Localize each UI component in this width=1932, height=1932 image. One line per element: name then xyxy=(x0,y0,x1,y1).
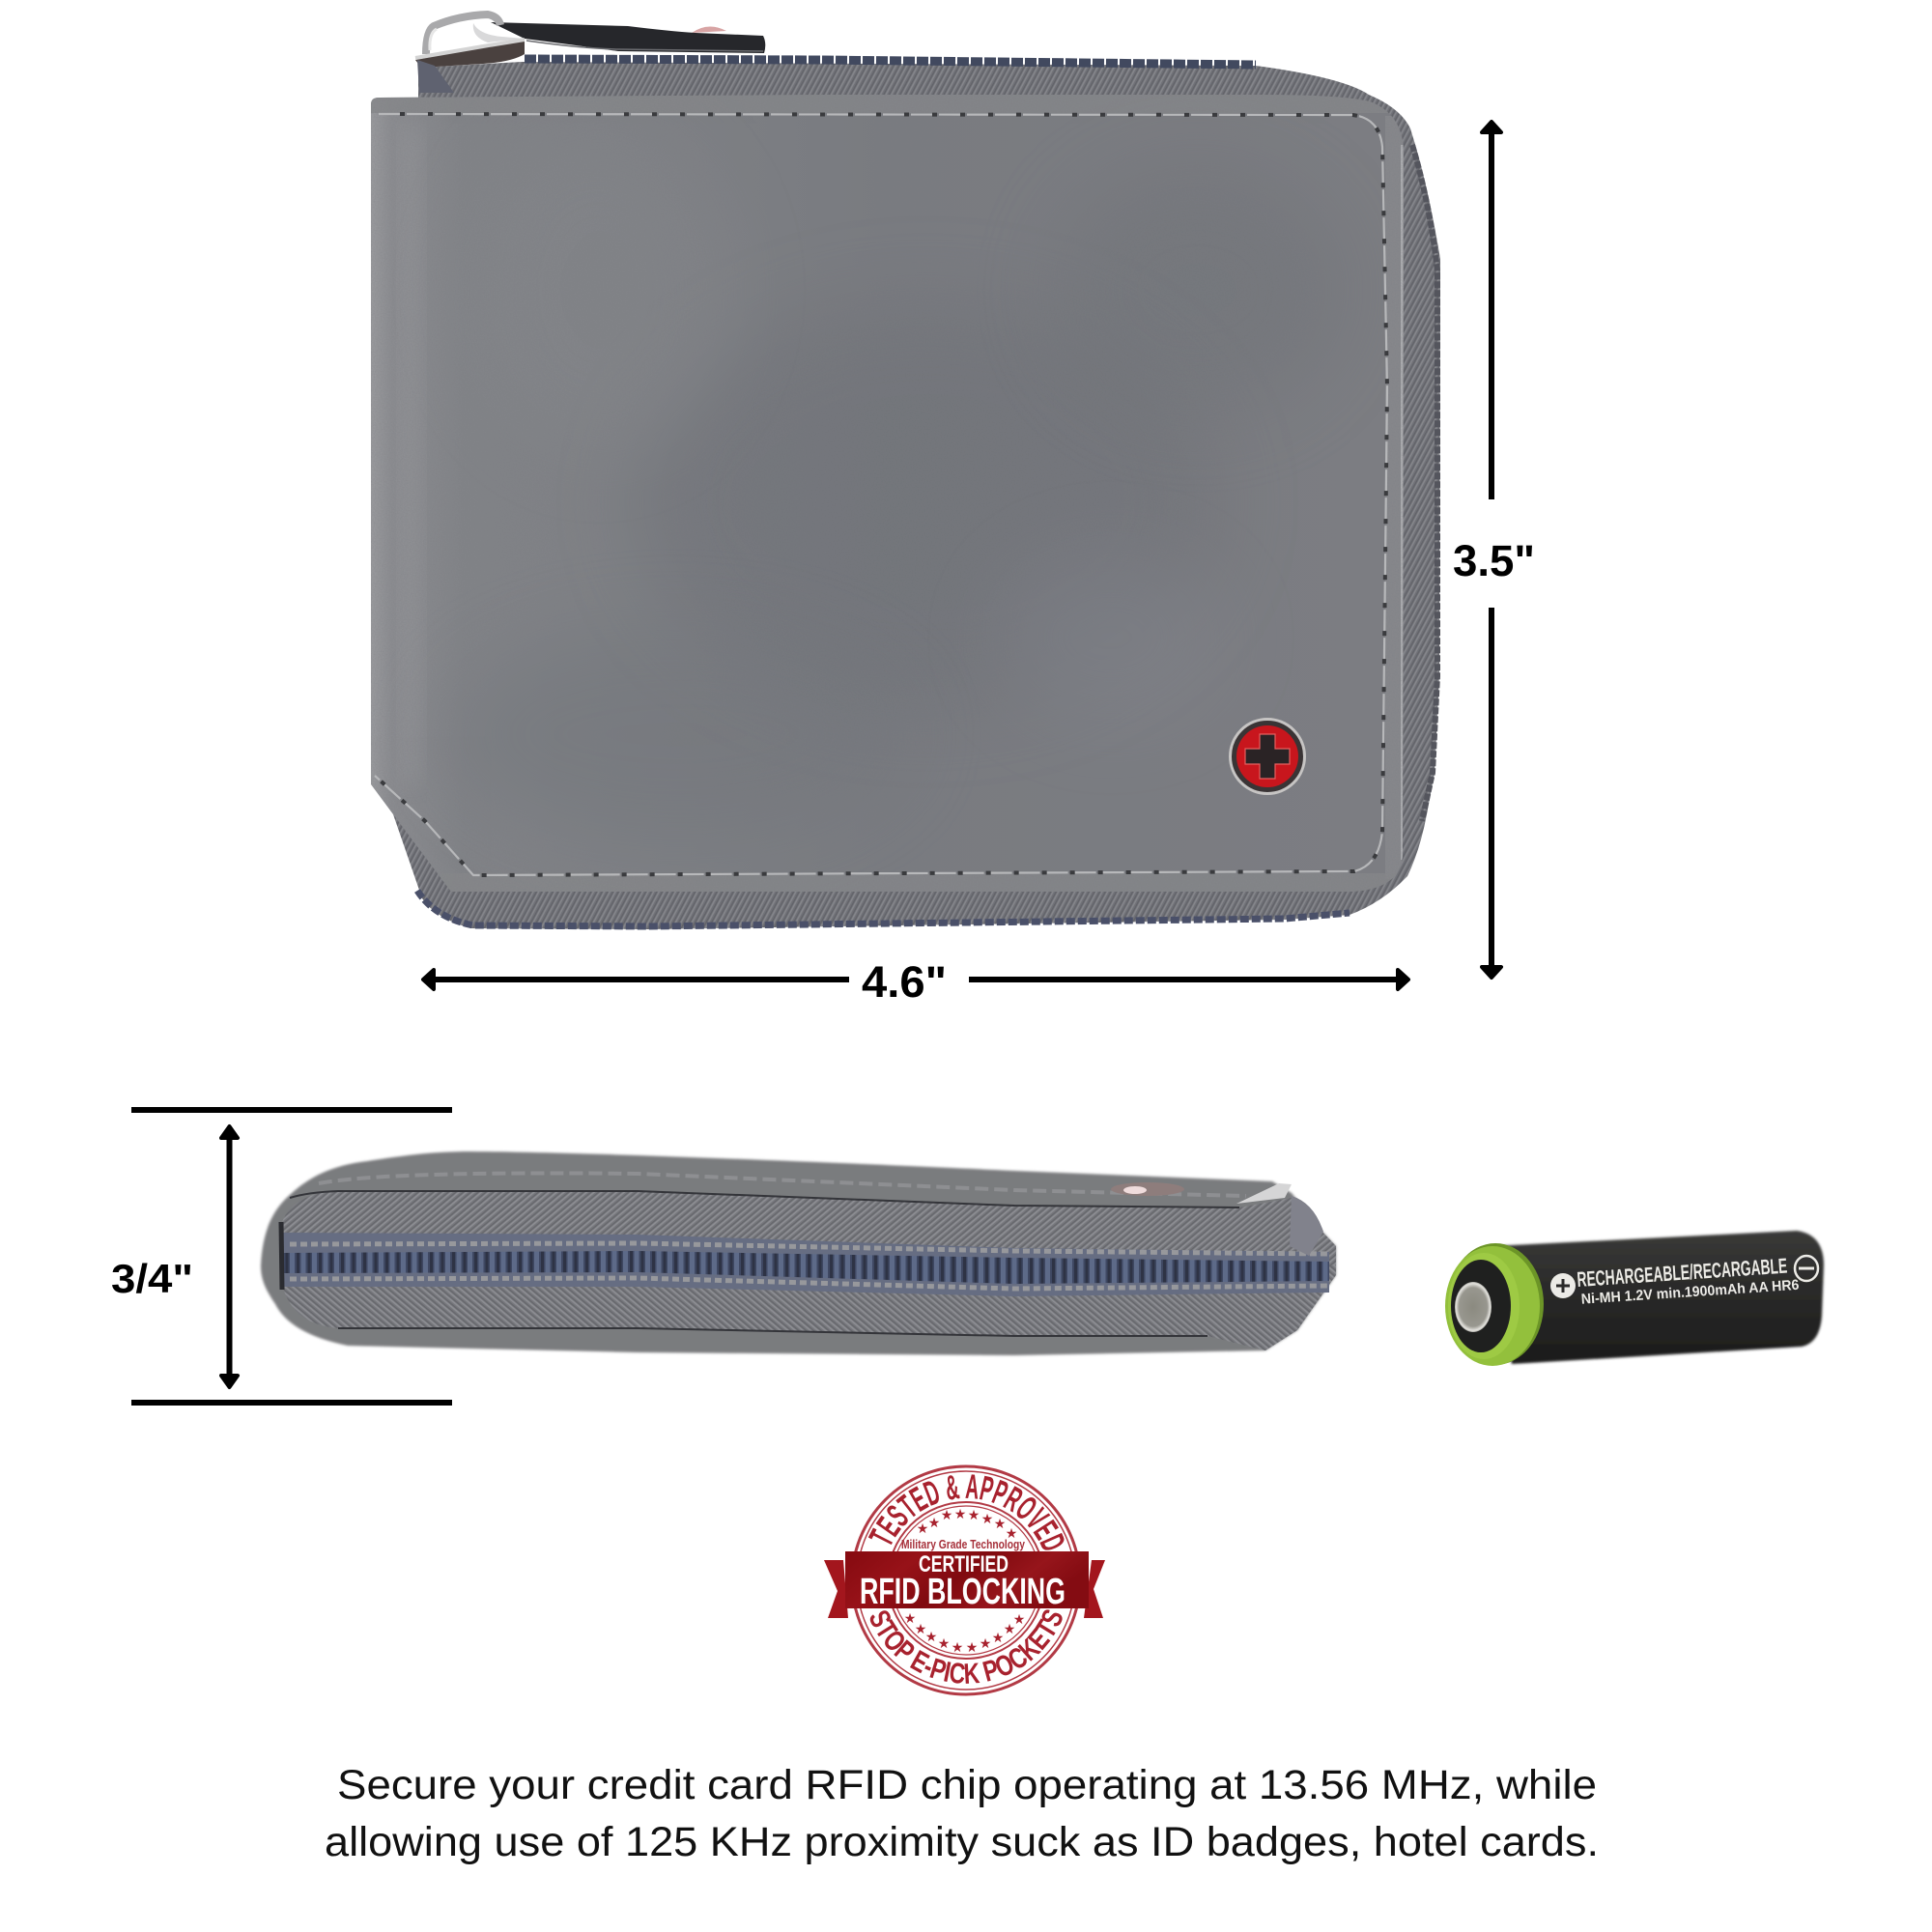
battery body xyxy=(1492,1231,1824,1364)
stamp stars: ★ xyxy=(1004,1621,1015,1636)
leather front panel xyxy=(371,95,1405,893)
seam shadows xyxy=(290,1191,1239,1336)
depth bracket: top line xyxy=(131,1107,452,1113)
arrow: height dimension xyxy=(1482,122,1501,978)
fabric tape, lower xyxy=(282,1265,1336,1350)
battery label xyxy=(1577,1253,1800,1308)
side leather shell xyxy=(261,1151,1336,1355)
banner rfid blocking text: RFID BLOCKING xyxy=(860,1572,1065,1612)
ribbon banner xyxy=(845,1551,1089,1608)
stamp stars: ★ xyxy=(938,1635,950,1651)
icon: red cross emblem xyxy=(1230,719,1305,794)
stamp stars: ★ xyxy=(992,1630,1004,1645)
stamp stars: ★ xyxy=(968,1507,980,1522)
left end shadow xyxy=(281,1222,282,1290)
side stitching line xyxy=(319,1173,1246,1196)
wallet side view xyxy=(261,1151,1336,1355)
description text: Secure your credit card RFID chip operating at 13.56 MHz, while xyxy=(337,1762,1597,1808)
ribbon left tail xyxy=(824,1560,848,1618)
stamp stars: ★ xyxy=(994,1516,1006,1531)
battery green cap xyxy=(1445,1243,1544,1366)
RFID blocking stamp badge xyxy=(824,1464,1105,1696)
zipper tape around wallet xyxy=(386,62,1440,929)
arrow: depth dimension xyxy=(221,1126,238,1387)
stamp stars: ★ xyxy=(1006,1525,1017,1541)
stamp bottom text: STOP E-PICK POCKETS xyxy=(869,1609,1063,1684)
stamp stars: ★ xyxy=(954,1506,966,1521)
depth bracket: bottom line xyxy=(131,1400,452,1406)
navy zipper teeth, bottom xyxy=(417,891,1350,926)
zipper side edge, right xyxy=(1412,145,1437,821)
stamp stars: ★ xyxy=(952,1639,963,1655)
leather highlight, top edge xyxy=(1236,1183,1292,1204)
label: height 3.5 inches: 3.5" xyxy=(1453,536,1535,585)
icon: battery plus xyxy=(1550,1273,1576,1298)
stamp stars: ★ xyxy=(980,1635,991,1651)
battery label: RECHARGEABLE/RECARGABLE xyxy=(1577,1254,1788,1292)
stamp top text: TESTED & APPROVED xyxy=(867,1474,1065,1550)
zipper teeth xyxy=(282,1233,1329,1296)
snap emblem seen edge-on xyxy=(1111,1182,1184,1196)
arrow: width dimension xyxy=(423,970,1408,989)
battery label: Ni-MH 1.2V min.1900mAh AA HR6 xyxy=(1580,1277,1800,1308)
fabric tape, upper xyxy=(282,1191,1336,1265)
icon: battery minus xyxy=(1795,1256,1818,1281)
stamp stars: ★ xyxy=(925,1629,937,1644)
ribbon right tail xyxy=(1084,1560,1105,1618)
leather stitching xyxy=(375,114,1387,875)
right end fold xyxy=(1290,1196,1323,1256)
stamp stars: ★ xyxy=(915,1621,926,1636)
stamp stars xyxy=(904,1506,1025,1655)
label: width 4.6 inches: 4.6" xyxy=(862,957,947,1007)
stamp stars: ★ xyxy=(917,1520,928,1536)
stamp stars: ★ xyxy=(928,1515,940,1530)
AA battery for scale xyxy=(1445,1231,1824,1366)
navy zipper teeth, top xyxy=(525,59,1256,65)
label: depth 3/4 inch: 3/4" xyxy=(111,1256,193,1301)
stamp stars: ★ xyxy=(941,1507,952,1522)
zipper pull and slider xyxy=(415,14,765,93)
banner certified text: CERTIFIED xyxy=(919,1551,1009,1577)
stamp stars: ★ xyxy=(981,1511,993,1526)
wallet front view xyxy=(371,14,1440,929)
description text: allowing use of 125 KHz proximity suck as ID badges, hotel cards. xyxy=(325,1819,1599,1865)
stamp rings xyxy=(852,1466,1080,1694)
stamp stars: ★ xyxy=(904,1610,916,1626)
stamp military text: Military Grade Technology xyxy=(901,1537,1026,1551)
description text xyxy=(325,1762,1599,1865)
stamp stars: ★ xyxy=(1013,1611,1025,1627)
stamp stars: ★ xyxy=(966,1639,978,1655)
